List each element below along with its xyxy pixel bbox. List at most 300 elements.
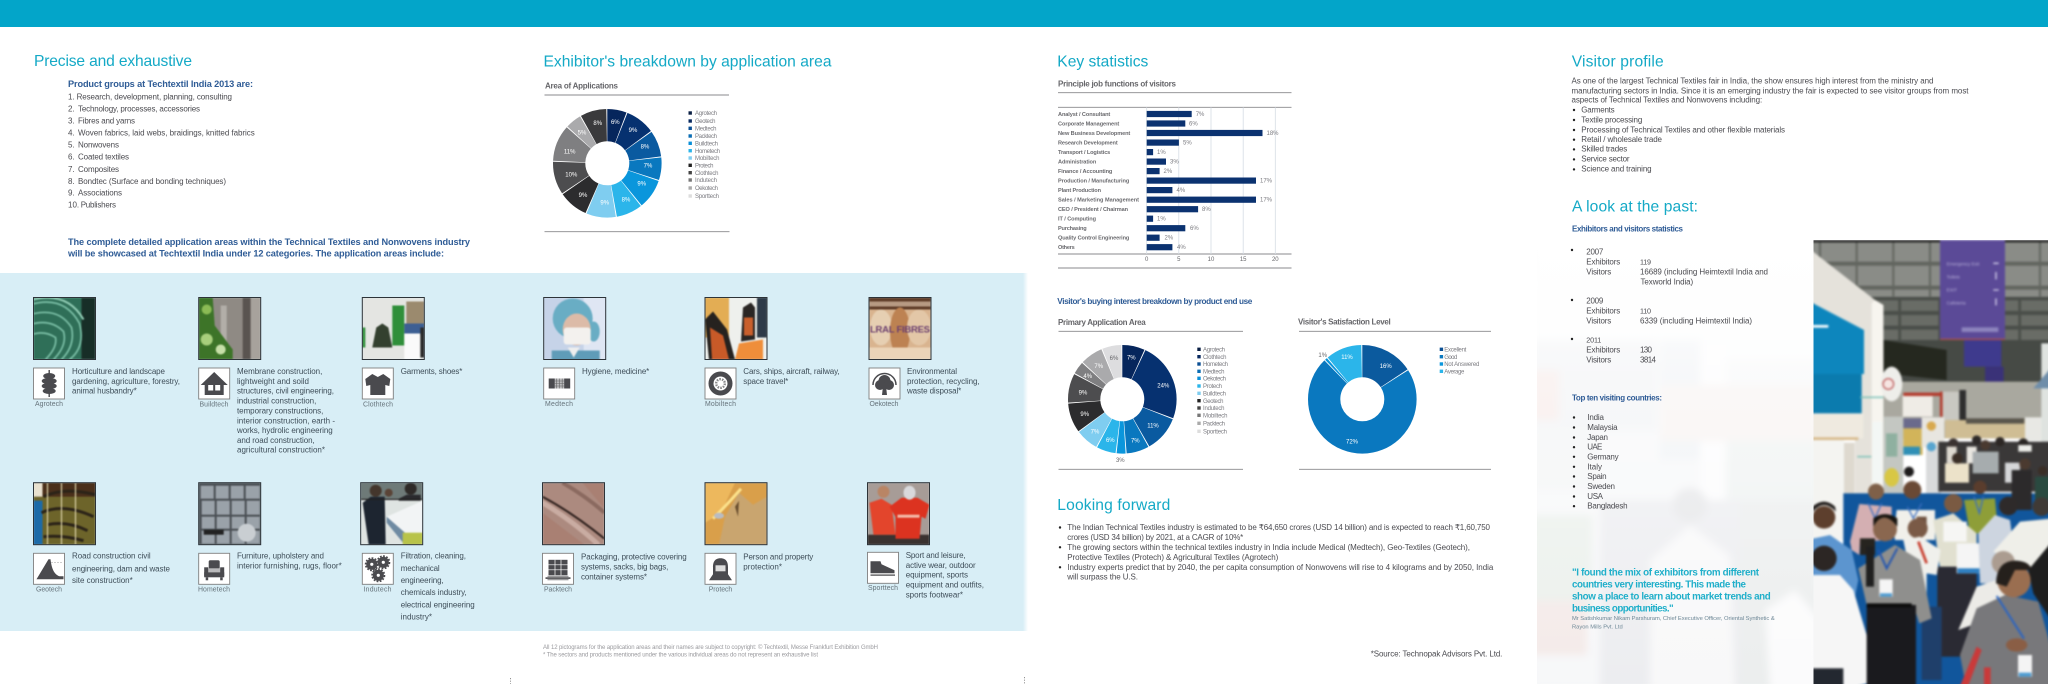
photo: agrotech <box>28 298 96 360</box>
legend: area of applications: Hometech <box>695 149 720 155</box>
product group list: 6. <box>68 153 75 162</box>
photo: clothtech <box>362 298 424 360</box>
bar chart: job functions: 10 <box>1208 257 1215 263</box>
legend: primary application area: Indutech <box>1203 406 1224 412</box>
subheading: exhibitors and visitors: Exhibitors and visitors statistics <box>1572 224 1684 233</box>
source note: *Source: Technopak Advisors Pvt. Ltd. <box>1371 650 1502 659</box>
intro paragraph <box>67 237 471 259</box>
description: sporttech: equipment, sports <box>906 571 968 580</box>
countries list: Malaysia <box>1587 423 1618 432</box>
description: buildtech: structures, civil engineering, <box>237 387 334 396</box>
heading: a look at the past: A look at the past: <box>1572 199 1698 216</box>
label: buildtech: Buildtech <box>200 401 229 408</box>
donut chart: primary application area <box>1079 356 1170 464</box>
heading: visitor profile: Visitor profile <box>1572 54 1664 71</box>
legend: satisfaction level: Good <box>1444 355 1457 361</box>
description: oekotech: protection, recycling, <box>907 377 980 386</box>
intro text: manufacturing sectors in India. Since it is an emerging industry the fair is expected to see visitor groups from most <box>1572 86 1969 95</box>
bar chart: job functions: Sales / Marketing Management <box>1058 198 1139 204</box>
product group list: Nonwovens <box>78 141 119 150</box>
ceiling <box>1807 240 2048 390</box>
label: oekotech: Oekotech <box>870 401 899 408</box>
heading: key statistics: Key statistics <box>1057 54 1149 71</box>
product group list: 7. <box>68 165 75 174</box>
chart title: area of applications: Area of Applications <box>545 82 619 91</box>
legend: primary application area: Protech <box>1203 384 1222 390</box>
description: protech: protection* <box>743 562 782 571</box>
visitor groups list <box>1573 105 1785 174</box>
description: mobiltech: Cars, ships, aircraft, railway, <box>743 367 840 376</box>
donut chart: primary application area: 6% <box>1106 438 1115 444</box>
legend: area of applications: Packtech <box>695 134 717 140</box>
heading: precise and exhaustive: Precise and exhaustive <box>34 53 192 70</box>
bar chart: job functions: 7% <box>1196 112 1205 118</box>
product group list: Technology, processes, accessories <box>78 104 200 113</box>
description: geotech: site construction* <box>72 576 133 585</box>
countries list <box>1573 413 1628 511</box>
donut chart: satisfaction level: 72% <box>1346 439 1359 445</box>
donut chart: primary application area: 6% <box>1110 356 1119 362</box>
legend: primary application area: Packtech <box>1203 422 1225 428</box>
legend: area of applications: Agrotech <box>695 111 717 117</box>
testimonial attribution: Mr Satishkumar Nikam Parshuram, Chief Executive Officer, Oriental Synthetic & <box>1572 616 1775 622</box>
product group list: Fibres and yarns <box>78 116 135 125</box>
countries list: Germany <box>1587 452 1619 461</box>
left foreground people <box>1814 500 1868 684</box>
description: geotech: engineering, dam and waste <box>72 564 171 573</box>
bar chart: job functions: 1% <box>1157 217 1166 223</box>
past statistics: 2011 <box>1586 336 1601 345</box>
bar chart: job functions: 5 <box>1177 257 1181 263</box>
product group list: 10. <box>68 201 79 210</box>
chart title: primary application area: Primary Application Area <box>1058 318 1146 327</box>
product group list: 3. <box>68 116 75 125</box>
label: agrotech: Agrotech <box>35 401 63 408</box>
testimonial quote <box>1572 568 1771 615</box>
bar chart: job functions: Corporate Management <box>1058 122 1119 128</box>
card: geotech <box>34 483 171 593</box>
product group list: 5. <box>68 141 75 150</box>
description: oekotech <box>906 367 980 396</box>
photo: oekotech: LRAL FIBRES <box>870 324 930 336</box>
past statistics: Exhibitors <box>1586 306 1620 315</box>
label: hometech: Hometech <box>198 586 230 593</box>
photo: packtech <box>542 483 604 545</box>
description: sporttech: active wear, outdoor <box>906 561 976 570</box>
mid crowd people <box>1850 481 2048 657</box>
description: clothtech: Garments, shoes* <box>401 367 462 376</box>
description: indutech: chemicals industry, <box>401 588 467 597</box>
bar chart: job functions: 17% <box>1260 198 1273 204</box>
product group list: Bondtec (Surface and bonding techniques) <box>78 177 226 186</box>
legend: primary application area: Oekotech <box>1203 376 1226 382</box>
bar chart: job functions: 1% <box>1157 150 1166 156</box>
photo: medtech <box>544 298 606 360</box>
panel: application areas band <box>0 273 1028 631</box>
description: packtech: Packaging, protective covering <box>581 552 687 561</box>
past statistics: Visitors <box>1586 267 1611 276</box>
donut chart: primary application area: 11% <box>1147 423 1159 429</box>
product group list: Publishers <box>81 201 116 210</box>
visitor groups list: Textile processing <box>1581 115 1642 124</box>
description: packtech <box>581 552 687 581</box>
legend: primary application area: Mobiltech <box>1203 414 1228 420</box>
donut chart: satisfaction level <box>1318 353 1400 445</box>
past statistics: Visitors <box>1586 316 1611 325</box>
bar chart: job functions: Others <box>1058 245 1075 251</box>
donut chart: area of applications: 10% <box>565 172 578 178</box>
legend: area of applications: Medtech <box>695 126 716 132</box>
description: buildtech: works, hydrolic engineering <box>236 426 333 435</box>
legend: area of applications: Oekotech <box>695 186 718 192</box>
product group list: Associations <box>78 189 122 198</box>
past statistics: 130 <box>1640 345 1653 354</box>
photo: indutech <box>361 483 423 545</box>
description: buildtech: temporary constructions, <box>237 406 323 415</box>
testimonial attribution <box>1572 616 1775 630</box>
description: agrotech <box>72 367 180 396</box>
description: mobiltech: space travel* <box>743 377 788 386</box>
icon: agrotech wheat <box>34 368 64 399</box>
intro text: As one of the largest Technical Textiles fair in India, the show ensures high interest from the ministry and <box>1572 76 1934 85</box>
donut chart: area of applications: 6% <box>611 120 620 126</box>
testimonial quote: business opportunities." <box>1572 604 1674 615</box>
description: packtech: container systems* <box>581 572 647 581</box>
bar chart: job functions: Research Development <box>1058 141 1118 147</box>
donut chart: area of applications: 8% <box>593 121 603 127</box>
label: geotech: Geotech <box>36 586 62 593</box>
countries list: Sweden <box>1587 482 1615 491</box>
past statistics: Visitors <box>1586 355 1611 364</box>
donut chart: satisfaction level: 16% <box>1380 364 1392 370</box>
description: buildtech: and road construction, <box>237 436 315 445</box>
icon: mobiltech wheel <box>705 368 736 399</box>
bar chart: job functions: Transport / Logistics <box>1058 150 1110 156</box>
footnote <box>543 644 878 659</box>
legend: area of applications: Mobiltech <box>695 156 720 162</box>
label: protech: Protech <box>709 586 732 593</box>
bar chart: job functions: 15 <box>1240 257 1247 263</box>
icon: medtech plaster <box>544 368 575 399</box>
legend: area of applications: Sporttech <box>695 194 719 200</box>
product group list: Coated textiles <box>78 153 129 162</box>
description: indutech <box>401 552 475 621</box>
description: hometech: interior furnishing, rugs, floor* <box>237 562 342 571</box>
description: hometech <box>237 552 342 571</box>
legend: primary application area: Medtech <box>1203 370 1224 376</box>
footnote: * The sectors and products mentioned under the various individual areas do not represent an exhaustive list <box>543 653 818 659</box>
donut chart: primary application area: 7% <box>1091 430 1100 436</box>
description: packtech: systems, sacks, big bags, <box>581 562 668 571</box>
visitor groups list: Service sector <box>1581 155 1630 164</box>
chart title: satisfaction level: Visitor's Satisfaction Level <box>1298 317 1391 326</box>
looking forward bullet list: Protective Textiles (Protech) & Agricultural Textiles (Agrotech) <box>1067 553 1279 562</box>
photo: sporttech <box>868 483 930 545</box>
label: mobiltech: Mobiltech <box>705 401 736 408</box>
countries list: Japan <box>1587 433 1608 442</box>
photo: protech <box>705 483 767 545</box>
icon: protech helmet <box>705 553 736 584</box>
legend: primary application area: Agrotech <box>1203 348 1225 354</box>
panel: precise and exhaustive <box>34 53 471 259</box>
donut chart: primary application area: 9% <box>1080 412 1090 418</box>
description: sporttech: Sport and leisure, <box>906 551 966 560</box>
subheading: top ten countries: Top ten visiting countries: <box>1572 394 1662 403</box>
testimonial attribution: Rayon Mills Pvt. Ltd <box>1572 624 1623 630</box>
bar chart: job functions: Purchasing <box>1058 226 1087 232</box>
description: geotech: Road construction civil <box>72 552 151 561</box>
icon: packtech pallet <box>542 553 574 584</box>
description: buildtech <box>236 367 335 455</box>
footnote: All 12 pictograms for the application areas and their names are subject to copyright: © Techtextil, Messe Frankfurt Exhibition GmbH <box>543 644 878 651</box>
description: indutech: engineering, <box>401 576 444 585</box>
looking forward bullet list: will surpass the U.S. <box>1066 572 1138 582</box>
purple banners: Emergency Exit <box>1947 261 1980 266</box>
donut chart: primary application area: 3% <box>1116 458 1125 464</box>
legend: satisfaction level: Excellent <box>1444 348 1467 354</box>
description: indutech: Filtration, cleaning, <box>401 552 466 561</box>
countries list: India <box>1587 413 1605 422</box>
visitor groups list: Retail / wholesale trade <box>1581 135 1663 144</box>
description: indutech: industry* <box>401 612 432 621</box>
product group list: 8. <box>68 177 75 186</box>
bar chart: job functions: IT / Computing <box>1058 217 1097 223</box>
countries list: Italy <box>1587 462 1602 471</box>
donut chart: satisfaction level: 1% <box>1318 353 1328 359</box>
legend: area of applications: Geotech <box>695 119 716 125</box>
label: packtech: Packtech <box>544 586 572 593</box>
product group list: 4. <box>68 129 75 138</box>
icon: buildtech house <box>199 368 230 399</box>
floor <box>1843 493 2048 684</box>
looking forward bullet list: Industry experts predict that by 2040, the per capita consumption of Nonwovens will rise to 4 kilograms and by 2050, India <box>1067 563 1494 572</box>
card: buildtech <box>199 298 335 455</box>
icon: indutech gears <box>362 553 393 584</box>
label: clothtech: Clothtech <box>363 401 393 408</box>
legend: primary application area: Clothtech <box>1203 355 1226 361</box>
description: agrotech: animal husbandry* <box>72 387 137 396</box>
bar chart: job functions: 2% <box>1164 169 1173 175</box>
donut chart: primary application area: 7% <box>1131 438 1140 444</box>
bar chart: job functions: Production / Manufacturing <box>1058 179 1130 185</box>
description: sporttech <box>906 551 984 600</box>
description: buildtech: agricultural construction* <box>237 446 325 455</box>
card: packtech <box>542 483 687 593</box>
description: oekotech: Environmental <box>907 367 957 376</box>
legend: primary application area: Geotech <box>1203 399 1224 405</box>
label: indutech: Indutech <box>364 586 392 593</box>
past statistics: 2009 <box>1586 296 1604 305</box>
description: sporttech: equipment and outfits, <box>906 581 984 590</box>
label: medtech: Medtech <box>545 401 573 408</box>
chart title: job functions: Principle job functions of visitors <box>1058 80 1177 89</box>
card: protech <box>705 483 813 593</box>
description: agrotech: gardening, agriculture, forestry, <box>72 377 180 386</box>
product group list: Composites <box>78 165 119 174</box>
donut chart: area of applications: 9% <box>579 193 588 199</box>
card: indutech <box>361 483 475 621</box>
purple banners: Toilets <box>1947 275 1961 280</box>
bar chart: job functions: 6% <box>1190 226 1199 232</box>
photo: exhibition hall crowd <box>1807 240 2048 684</box>
description: mobiltech <box>743 367 840 386</box>
panel: key statistics <box>1057 54 1502 659</box>
description: protech <box>743 552 813 571</box>
donut chart: primary application area: 24% <box>1157 384 1170 390</box>
description: buildtech: industrial construction, <box>237 397 316 406</box>
looking forward bullet list: crores (USD 34 billion) by 2021, at a CAGR of 10%* <box>1067 533 1243 542</box>
legend: area of applications: Buildtech <box>695 142 718 148</box>
card: agrotech <box>28 298 180 408</box>
bar chart: job functions: 4% <box>1176 188 1186 194</box>
bar chart: job functions: Analyst / Consultant <box>1058 112 1110 118</box>
faded background photo <box>1537 368 1814 684</box>
center grey-shirt man <box>1858 514 1942 684</box>
description: oekotech: waste disposal* <box>906 387 961 396</box>
looking forward bullet list: The growing sectors within the technical textiles industry in India include Medical (Medtech), Geo-Textiles (Geotech), <box>1067 543 1470 552</box>
product group list <box>68 92 255 210</box>
bar chart: job functions: New Business Development <box>1058 131 1130 137</box>
bar chart: job functions: 20 <box>1272 257 1279 263</box>
photo: mobiltech <box>705 298 767 360</box>
bar chart: job functions: Administration <box>1058 160 1097 166</box>
visitor groups list: Garments <box>1581 105 1615 114</box>
description: geotech <box>72 552 171 585</box>
donut chart: primary application area: 7% <box>1094 364 1104 370</box>
description: sporttech: sports footwear* <box>906 591 963 600</box>
card: medtech <box>544 298 649 408</box>
legend: primary application area: Sporttech <box>1203 430 1227 436</box>
bar chart: job functions: 2% <box>1164 236 1174 242</box>
bar chart: job functions: 0 <box>1145 257 1149 263</box>
past statistics <box>1571 247 1768 364</box>
legend: area of applications: Clothtech <box>695 171 718 177</box>
donut chart: area of applications <box>564 120 653 206</box>
description: buildtech: Membrane construction, <box>237 367 322 376</box>
panel: exhibitor breakdown <box>544 54 832 232</box>
purple banners <box>1940 240 2005 389</box>
legend: satisfaction level: Average <box>1444 370 1465 376</box>
description: buildtech: lightweight and soild <box>237 377 309 386</box>
legend: area of applications: Indutech <box>695 178 717 184</box>
card: oekotech <box>869 298 980 408</box>
donut chart: area of applications: 9% <box>600 200 610 206</box>
past statistics: 2007 <box>1586 247 1604 256</box>
photo: hometech <box>199 483 261 545</box>
past statistics: Texworld India) <box>1640 277 1694 286</box>
card: sporttech <box>868 483 984 600</box>
donut chart: area of applications: 11% <box>564 149 576 155</box>
countries list: Bangladesh <box>1587 502 1628 511</box>
donut chart: satisfaction level: 11% <box>1341 355 1353 361</box>
card: hometech <box>198 483 342 593</box>
countries list: USA <box>1587 492 1604 501</box>
legend: area of applications <box>688 111 720 200</box>
countries list: Spain <box>1587 472 1607 481</box>
past statistics: Exhibitors <box>1586 257 1620 266</box>
legend: primary application area <box>1197 348 1228 436</box>
legend: satisfaction level: Not Answered <box>1444 362 1479 368</box>
intro text: aspects of Technical Textiles and Nonwovens including: <box>1572 96 1762 105</box>
intro text <box>1572 76 1969 105</box>
donut chart: area of applications: 5% <box>578 131 587 137</box>
past statistics: 6339 (including Heimtextil India) <box>1640 316 1752 325</box>
donut chart: primary application area: 4% <box>1083 374 1093 380</box>
bar chart: job functions: Finance / Accounting <box>1058 169 1113 175</box>
bar chart: job functions <box>1058 111 1279 263</box>
donut chart: area of applications: 8% <box>641 145 650 151</box>
donut chart: area of applications: 9% <box>637 181 647 187</box>
testimonial quote: show a place to learn about market trends and <box>1572 592 1771 603</box>
label: sporttech: Sporttech <box>868 585 898 592</box>
front right man <box>1958 551 2048 684</box>
looking forward bullet list <box>1059 523 1494 582</box>
past statistics: 110 <box>1640 306 1651 315</box>
icon: geotech slope <box>34 553 64 584</box>
icon: sporttech shoe <box>868 552 898 583</box>
bar chart: job functions: Quality Control Engineering <box>1058 236 1130 242</box>
bar chart: job functions: Plant Production <box>1058 188 1102 194</box>
far hall wall <box>1883 382 2048 438</box>
countries list: UAE <box>1587 443 1602 452</box>
bar chart: job functions: CEO / President / Chairman <box>1058 207 1129 213</box>
bar chart: job functions: 18% <box>1266 131 1279 137</box>
past statistics: 3814 <box>1640 355 1657 364</box>
icon: clothtech shirt <box>362 368 393 399</box>
description: protech: Person and property <box>743 552 813 561</box>
legend: primary application area: Hometech <box>1203 362 1228 368</box>
product group list: 1. Research, development, planning, consulting <box>68 92 232 102</box>
subheading: buying interest: Visitor's buying interest breakdown by product end use <box>1057 297 1253 306</box>
description: indutech: mechanical <box>401 564 440 573</box>
description: indutech: electrical engineering <box>401 600 475 609</box>
purple banners: EXIT <box>1947 287 1957 292</box>
card: mobiltech <box>705 298 840 408</box>
top banner <box>0 0 2048 27</box>
donut chart: area of applications: 8% <box>622 198 631 204</box>
subheading: product groups: Product groups at Techtextil India 2013 are: <box>68 79 253 89</box>
panel: visitor profile <box>1571 54 1969 630</box>
donut chart: primary application area: 9% <box>1079 390 1088 396</box>
bar chart: job functions: 5% <box>1183 141 1192 147</box>
visitor groups list: Science and training <box>1581 165 1652 174</box>
back crowd <box>1904 435 2048 510</box>
donut chart: area of applications: 7% <box>644 163 653 169</box>
legend: satisfaction level <box>1440 348 1479 376</box>
heading: exhibitor breakdown: Exhibitor's breakdown by application area <box>544 54 832 71</box>
legend: area of applications: Protech <box>695 164 714 170</box>
testimonial quote: countries very interesting. This made the <box>1572 580 1747 591</box>
icon: oekotech tree <box>869 368 900 399</box>
donut chart: area of applications: 9% <box>629 128 638 134</box>
icon: hometech armchair <box>199 553 230 584</box>
product group list: 9. <box>68 189 75 198</box>
bar chart: job functions: 6% <box>1189 122 1198 128</box>
product group list: 2. <box>68 104 75 113</box>
mid-hall booths <box>1881 343 2048 507</box>
looking forward bullet list: The Indian Technical Textiles industry is estimated to be ₹64,650 crores (USD 14 billion) and is expected to reach ₹1,60,750 <box>1067 523 1491 532</box>
bar chart: job functions: 17% <box>1260 179 1273 185</box>
bar chart: job functions: 8% <box>1202 207 1211 213</box>
description: buildtech: interior construction, earth - <box>237 416 335 425</box>
past statistics: 16689 (including Heimtextil India and <box>1640 267 1768 276</box>
visitor groups list: Processing of Technical Textiles and other flexible materials <box>1581 125 1785 134</box>
past statistics: Exhibitors <box>1586 345 1620 354</box>
description: hometech: Furniture, upholstery and <box>237 552 324 561</box>
bar chart: job functions: 4% <box>1177 245 1186 251</box>
visitor groups list: Skilled trades <box>1581 145 1627 154</box>
legend: primary application area: Buildtech <box>1203 392 1226 398</box>
